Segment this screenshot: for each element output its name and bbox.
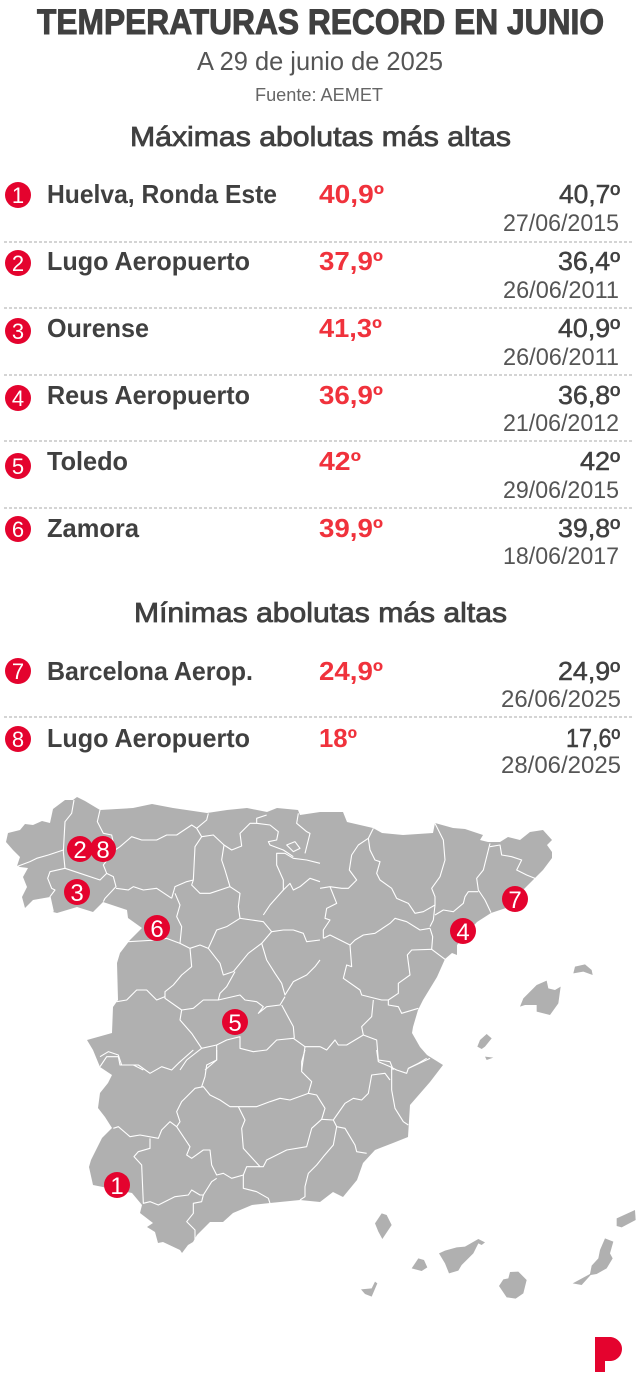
row 7: Barcelona: 24,9º: [558, 656, 621, 686]
row 1: Huelva: [5, 179, 621, 237]
row 2: Lugo: 36,4º: [558, 246, 621, 276]
row 4: Reus: Reus Aeropuerto: [47, 380, 250, 410]
row 5: Toledo: Toledo: [47, 446, 128, 476]
row 8: Lugo: 18º: [319, 723, 357, 753]
table: maximum temperatures: [4, 179, 632, 570]
marker 5: [222, 1009, 248, 1037]
row 2: Lugo: [5, 246, 621, 304]
province borders north-west: [17, 800, 320, 1070]
row 5: Toledo: 29/06/2015: [503, 477, 619, 504]
heading: maximum temperatures: Máximas abolutas más altas: [130, 121, 511, 152]
row 7: Barcelona: Barcelona Aerop.: [47, 656, 253, 686]
row 3: Ourense: Ourense: [47, 313, 149, 343]
row 5: Toledo: 5: [12, 454, 24, 479]
marker 6: 6: [150, 916, 164, 943]
row 6: Zamora: 6: [12, 517, 24, 542]
marker 2: [67, 836, 93, 864]
row 3: Ourense: [5, 313, 621, 371]
row 5: Toledo: 42º: [580, 446, 621, 476]
marker 8: [90, 836, 116, 864]
row 1: Huelva: 40,9º: [319, 179, 385, 209]
row 7: Barcelona: 24,9º: [319, 656, 384, 686]
row 6: Zamora: Zamora: [47, 513, 140, 543]
row 3: Ourense: 40,9º: [558, 313, 621, 343]
marker 3: [64, 879, 90, 907]
province borders north-east: [320, 823, 535, 1070]
row 2: Lugo: 2: [12, 251, 24, 276]
row 6: Zamora: 39,9º: [319, 513, 384, 543]
row 5: Toledo: [5, 446, 621, 504]
row 4: Reus: 36,9º: [319, 380, 384, 410]
row 8: Lugo: 17,6º: [566, 723, 620, 753]
row 4: Reus: [5, 380, 621, 437]
Balearic islands: [477, 964, 593, 1060]
row 6: Zamora: [5, 513, 621, 570]
marker 7: [502, 886, 528, 914]
province borders south: [100, 1050, 427, 1242]
marker 1: 1: [110, 1173, 124, 1200]
marker 4: [450, 918, 476, 946]
row 2: Lugo: Lugo Aeropuerto: [47, 246, 250, 276]
marker 2: 2: [73, 837, 87, 864]
map of Spain: [6, 797, 636, 1299]
row 3: Ourense: 26/06/2011: [503, 344, 619, 371]
row 7: Barcelona: 7: [12, 659, 24, 684]
Canary islands: [361, 1210, 636, 1299]
row 1: Huelva: Huelva, Ronda Este: [47, 179, 277, 209]
row 8: Lugo: Lugo Aeropuerto: [47, 723, 250, 753]
table: minimum temperatures: [4, 656, 632, 779]
logo: P: [595, 1337, 622, 1372]
row 1: Huelva: 27/06/2015: [503, 210, 619, 237]
row 3: Ourense: 41,3º: [319, 313, 383, 343]
map markers: [64, 836, 528, 1200]
subtitle: A 29 de junio de 2025: [197, 46, 443, 76]
marker 4: 4: [456, 919, 470, 946]
row 8: Lugo: [5, 723, 621, 779]
row 8: Lugo: 8: [12, 727, 24, 752]
row 6: Zamora: 39,8º: [558, 513, 621, 543]
row 5: Toledo: 42º: [319, 446, 362, 476]
source: Fuente: AEMET: [255, 85, 383, 105]
marker 8: 8: [96, 837, 110, 864]
row 7: Barcelona: 26/06/2025: [501, 686, 621, 713]
row 6: Zamora: 18/06/2017: [503, 543, 619, 570]
row 4: Reus: 36,8º: [558, 380, 621, 410]
row 4: Reus: 21/06/2012: [503, 410, 619, 437]
row 3: Ourense: 3: [12, 319, 24, 344]
marker 3: 3: [70, 880, 84, 907]
row 7: Barcelona: [5, 656, 621, 713]
marker 7: 7: [508, 887, 522, 914]
row 1: Huelva: 40,7º: [559, 179, 621, 209]
row 8: Lugo: 28/06/2025: [501, 752, 621, 779]
row 2: Lugo: 37,9º: [319, 246, 384, 276]
row 4: Reus: 4: [12, 386, 24, 411]
marker 5: 5: [228, 1010, 242, 1037]
row 1: Huelva: 1: [12, 183, 24, 208]
marker 1: [104, 1172, 130, 1200]
row 2: Lugo: 26/06/2011: [503, 277, 619, 304]
marker 6: [144, 915, 170, 943]
heading: minimum temperatures: Mínimas abolutas más altas: [134, 597, 507, 628]
mainland: [6, 797, 552, 1253]
